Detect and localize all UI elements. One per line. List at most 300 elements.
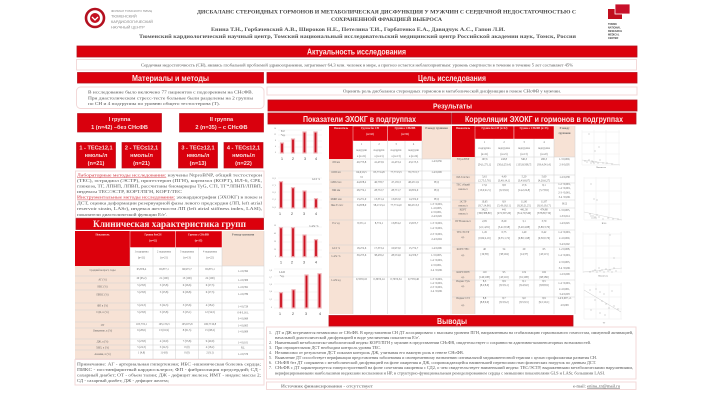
table: correlations of echo and hormones: [8,20;21,25] [517,204,531,208]
table: correlations of echo and hormones: 8,7 [502,297,506,300]
subgroup 3 box [178,142,218,168]
text block: relevance [76,60,636,70]
table: correlations of echo and hormones: [8,4;9,0] [519,284,529,287]
table: correlations of echo and hormones: [0,55;1,72] [498,237,510,240]
table: clinical characteristics: ИБС (%) [98,286,108,288]
table: echo indices: 8,3±1,4 [357,222,366,225]
table: clinical characteristics: 1 (4,8) [160,352,168,354]
table: correlations of echo and hormones: 8,29 [502,220,507,223]
table: correlations of echo and hormones: ед. [461,276,465,279]
bar chart: E/e': 8 [275,140,277,142]
table: correlations of echo and hormones: 11,87 [541,200,548,204]
bar chart: LASI: 4 [319,311,322,316]
table: correlations of echo and hormones: [2,1;4,81] [479,226,490,229]
table: clinical characteristics: 4 (18,2) [206,346,214,349]
table: echo indices: Н/Д [434,189,439,192]
text block: table note: СД - сахарный диабет; ДЖ - дефицит железа; [77,378,169,383]
table: echo indices: 48,4±11,9 [408,181,420,184]
text block: research methods: reservoir strain, LASr), индекса жесткости ЛП (left atrial stiffness index, LASI), [77,206,262,212]
table: echo indices: 64,6;16,5 [356,171,367,174]
heading: clinical characteristics: Клиническая характеристика групп [93,219,247,229]
table: correlations of echo and hormones: [93,4;541,4] [537,164,551,166]
subgroup 4 box: 4 - ТЕС≤12,1 [227,146,260,152]
table: clinical characteristics: 5 (24,3) [160,304,168,307]
table: correlations of echo and hormones: 3-4 <0,001 [559,196,571,199]
table: echo indices: подгрупп [374,149,385,152]
table: echo indices: Группа с СНсФВ [395,127,416,130]
funding note [266,382,636,390]
bar chart: E/e': 14 [274,128,277,130]
table: correlations of echo and hormones: [300;388,80] [478,212,492,215]
bar chart: LASr: 0 [275,256,277,258]
table: correlations of echo and hormones: 8,9 [502,280,506,283]
table: clinical characteristics: 9 (40,9) [206,340,214,343]
table: correlations of echo and hormones: 1-3 0,009, [559,158,570,161]
table: correlations of echo and hormones: (n=22) [540,153,548,156]
table: correlations of echo and hormones: [5,7;8,9] [539,189,549,192]
table: correlations of echo and hormones: [3,89;3,79] [538,226,550,229]
table: echo indices: ±2 [360,176,364,179]
group II box [180,114,264,132]
bar chart: LASr: LASr % [310,225,319,228]
funding note: Источник финансирования - отсутствует [281,383,373,388]
group I box: 1 (n=42) –без СНсФВ [91,124,148,131]
table: correlations of echo and hormones: 0,42 [542,231,547,234]
table: clinical characteristics: 1-4 0,729 [238,306,249,308]
table: clinical characteristics: 3-4 0,069 [238,318,249,320]
heading: relevance: Актуальность исследования [307,46,406,56]
table: echo indices: 13,3±1,4 [374,198,384,201]
table: correlations of echo and hormones: [0,30;0,76] [538,237,550,240]
table: correlations of echo and hormones: 441 [502,208,507,212]
table: echo indices [329,126,451,314]
table: echo indices: 1-3 0,005, [431,254,442,257]
bar chart: LASr [274,225,322,264]
table: correlations of echo and hormones: 17,6 [522,184,527,187]
table: correlations of echo and hormones: группами [559,132,571,135]
bar chart: LASr: 2 [291,260,294,264]
table: clinical characteristics: 1 (4,8) [138,352,145,354]
heading: aim [267,72,637,83]
subgroup 4 box: нмоль/л [232,153,255,159]
table: echo indices: 13,8±4,2 [391,222,401,225]
table: correlations of echo and hormones: [61;198] [519,276,529,279]
table: echo indices: 2-4 0,004 [431,238,442,241]
table: correlations of echo and hormones: 119 [522,271,527,274]
table: correlations of echo and hormones: 8,1 [542,184,546,187]
table: correlations of echo and hormones: Индекс СTI [456,297,470,300]
table: echo indices: подгрупп [391,149,402,152]
table: echo indices: подгрупп [408,149,419,152]
heading: correlations: Корреляции ЭХОКГ и гормонов в подгруппах [465,114,623,124]
bar chart: LASI: 0,2 [269,299,272,301]
table: echo indices: 77,7±13,3 [391,171,402,174]
text block: conclusions: СНсФВ без ДТ сопряжена с метаболической дисфункцией на фоне ожирения и ДЖ, сопровождающейся наименьшей переносимостью физических нагрузок по данным ДСТ. [275,361,596,366]
table: clinical characteristics: 6 (26,6) [183,284,191,287]
scatter plot 1 [582,130,620,169]
scatter plot 4 [584,283,622,324]
table: clinical characteristics: 6 (28,6) [137,329,146,332]
text block: research methods: Инструментальные методы исследования: эхокардиография (ЭХОКГ) в покое и [77,195,263,200]
text block: conclusions: 7. [269,366,272,370]
table: correlations of echo and hormones: 8,8 [502,184,506,187]
text block: conclusions: начальной диастолической дисфункцией в виде увеличения показателя Е/е'. [275,336,420,340]
table: correlations of echo and hormones: [272;507,20] [497,212,511,215]
table: clinical characteristics: 7 (53,8) [183,340,191,343]
table: echo indices: 13,6±5,7 [409,222,419,225]
logo: Tyumen cardiology research center [86,9,153,30]
heading: conclusions [329,316,573,326]
table: clinical characteristics: 2 подгруппа [157,250,172,254]
table: echo indices: 1-4 <0,001, [430,227,443,230]
text block: conclusions: Наименьший метаболическо-анаболический индекс КОРТ/ПГН у мужчин в представлении СНсФВ, свидетельствует о сохранности адаптивно-компенсаторных возможностей. [275,341,591,346]
table: correlations of echo and hormones: 474,80 [540,208,548,212]
table: clinical characteristics: 3 (23,6) [183,304,191,307]
bar chart: LASI: 0,6 [269,284,273,286]
subgroup 2 box: (n=21) [133,161,150,167]
table: correlations of echo and hormones: 2-4 0,009, [559,237,570,240]
table: correlations of echo and hormones: нмоль/л [458,204,468,208]
text block: aim: Оценить роль дисбаланса стероидных гормонов и метаболической дисфункции в генезе СНсФВ у мужчин. [343,90,561,94]
table: echo indices: 65,7±14,8 [374,171,385,174]
bar chart: LASI: 1 [279,311,282,316]
table: clinical characteristics: 65,8±6,4 [137,268,147,271]
table: clinical characteristics: 6 (26,8) [183,291,191,294]
text block: conclusions: ДТ и ДЖ встречаются независимо от СНсФВ. В представлении СН ДТ ассоциировано с высоким уровнем ПГН, направленным на стабилизацию гормонального гомеостаза, иммунной активацией, [275,331,633,336]
table: echo indices: 4 [413,143,415,146]
logo: Tomsk National Research Medical Center: CENTER [608,37,618,40]
table: clinical characteristics: 0 (0) [184,352,190,354]
table: clinical characteristics: ОТ [101,324,105,327]
logo: Tyumen cardiology research center: ФИЛИАЛ ТОМСКОГО НИМЦ [111,9,153,13]
heading: results: Результаты [433,102,472,111]
table: correlations of echo and hormones: [6,3;9,9] [499,189,509,192]
table: correlations of echo and hormones: [5,43;18,11] [497,204,511,208]
table: correlations of echo and hormones: 1,45 [482,231,488,234]
table: clinical characteristics: Показатель [95,234,110,236]
table: correlations of echo and hormones: 0,75 [502,231,507,234]
bar chart: LASI: 2 [292,311,295,316]
heading: echo indices in subgroups [268,113,451,124]
table: clinical characteristics: (n=35) [195,240,202,242]
text block: conclusions: 6. [269,361,272,365]
bar chart: GLS: 16,5 [272,192,277,194]
table: correlations of echo and hormones: ед. [461,285,465,288]
bar chart: LASI: 0,4 [269,291,273,293]
table: correlations of echo and hormones: [2,75;5,76] [479,180,491,182]
table: correlations of echo and hormones: [3,20;4,88] [518,226,530,229]
table: correlations of echo and hormones: [9,5;10,1] [539,301,549,304]
bar chart: GLS: 15,5 [272,199,277,201]
table: correlations of echo and hormones: [8,2;8,9] [480,284,489,287]
table: echo indices: 3 [395,143,397,146]
text block: conclusions: 4. [269,351,272,355]
text block: table note: сахарный диабет; ОТ - объем талии; ДЖ - дефицит железа; ИМТ - индекс массы 2; [77,372,261,378]
table: echo indices: 18,2±2,6 [357,247,367,250]
table: echo indices: Н/Д [434,181,439,184]
table: correlations of echo and hormones: ИЛ-6 пг/мл [456,176,470,179]
table: echo indices: 41,4±3,9 [374,161,384,164]
authors and affiliation: Енина Т.Н., Горбачевский А.В., Широков Н.Е., Петелина Т.И., Горбатенко Е.А., Давидчук А.С., Гапон Л.И. [211,26,506,33]
table: echo indices: 2-3 <0,001, [430,233,443,236]
table: echo indices: 39,2±5,6 [357,254,367,257]
table: correlations of echo and hormones: 1-4 0,045 [559,222,570,225]
table: correlations of echo and hormones: подгруппа [498,147,511,150]
table: clinical characteristics: 5 (23,8) [137,311,146,314]
table: echo indices: 76,7±15,7 [408,171,420,174]
table: echo indices: LASr % [332,255,341,258]
table: correlations of echo and hormones: 5,61 [482,176,488,178]
table: correlations of echo and hormones: [54,1;271,1] [478,164,491,166]
table: echo indices: 2-4 <0,001 [431,269,443,272]
table: clinical characteristics: 1-4 0,300 [238,279,249,282]
table: correlations of echo and hormones: ТЕС общий [456,184,470,186]
table: correlations of echo and hormones: 3 [523,141,525,144]
bar chart: LASr: 1 [280,260,283,264]
table: clinical characteristics: 1-4 0,392 [238,270,249,273]
bar chart: LASI: 0,7 [269,277,273,279]
scatter plot 2: ИЛ-6 [602,223,606,225]
table: correlations of echo and hormones: 2-3 0,003, [559,261,570,264]
text block: conclusions: При отрицательном ДСТ необходим контроль уровня ТЕС. [275,346,381,350]
table: correlations of echo and hormones: 65 [543,248,546,251]
table: correlations of echo and hormones: 1-4 <0,001, [558,254,571,257]
table: correlations of echo and hormones: Группа без СН (n=42) [482,127,508,130]
table: echo indices: 28,7±2,7 [374,189,384,192]
table: correlations of echo and hormones: [19;38] [481,253,489,256]
table: correlations of echo and hormones: 10,65 [481,200,488,204]
table: clinical characteristics: 0-8 0,161, [238,312,249,314]
table: correlations of echo and hormones: 1-2 0,008, [559,248,570,251]
table: echo indices: 1-4 <0,001, [430,282,443,285]
group I box: I группа [109,117,131,123]
table: clinical characteristics: 1-4 0,101 [238,342,249,344]
heading: results [268,100,637,111]
bar chart: LASI: *ед. [280,275,285,278]
table: echo indices: 38,4±6,2 [374,254,384,257]
table: correlations of echo and hormones [452,126,575,314]
subgroup 1 box: (n=21) [88,161,104,167]
text block: table note [75,360,264,385]
table: echo indices: 15,7±2,7 [409,247,419,250]
table: correlations of echo and hormones: [3,40;14,1] [498,180,510,182]
table: clinical characteristics: 6 (27,3) [206,291,214,294]
table: clinical characteristics: 1-4 0,009 [238,330,249,334]
table: echo indices: 1-3 <0,001, [430,278,443,281]
text block: conclusions: Независимо от результатов ДСТ показан контроль ДЖ, учитывая его важную роль в генезе СНсФВ. [275,351,464,356]
bar chart: LASI: LASI [279,271,285,274]
table: clinical characteristics: Группа с СНсФВ [188,234,209,236]
table: correlations of echo and hormones: 1-4 <0,001, [558,282,571,285]
table: clinical characteristics: 22 (100) [205,277,215,280]
table: correlations of echo and hormones: (n=21) [500,153,508,156]
table: correlations of echo and hormones: 5,20 [522,176,527,178]
table: echo indices: 77,7±14,0 [391,204,402,207]
table: clinical characteristics: 8 (61,5) [183,329,191,332]
table: correlations of echo and hormones: (n=21) [481,153,488,156]
bar chart: GLS: 4 [315,211,318,216]
table: correlations of echo and hormones: Н/Д [562,202,567,206]
table: correlations of echo and hormones: [135,8;508,7] [517,164,531,166]
table: correlations of echo and hormones: 17,6 [482,184,488,187]
table: correlations of echo and hormones: 1-2 0,009 [559,273,570,276]
table: echo indices: а (n=22) [409,155,418,158]
table: clinical characteristics: 5 (24,3) [160,346,168,349]
subgroup 3 box: 3 - ТЕС≥12,1 [181,146,215,152]
table: echo indices: 68,4±13,3 [408,204,420,207]
table: correlations of echo and hormones: 8,5 [542,280,546,283]
table: clinical characteristics: 1-4 0,576 [238,353,249,356]
subgroup 1 box: 1 - ТЕС≥12,1 [79,146,113,152]
logo: Tyumen cardiology research center: НАУЧНЫЙ ЦЕНТР [111,24,145,30]
text block: table note: Примечание: АГ - артериальная гипертензия; ИБС -ишемическая болезнь сердца; [77,362,261,366]
table: correlations of echo and hormones: 102 [542,271,547,274]
text block: conclusions: 5. [269,356,272,360]
table: correlations of echo and hormones: 243,8 [501,158,508,161]
table: correlations of echo and hormones: подгруппа [538,147,551,150]
table: clinical characteristics: 20 (95,2) [137,277,147,280]
logo: Tomsk National Research Medical Center: NATIONAL [608,26,621,30]
table: echo indices: 8,7±2,1 [375,222,384,225]
table: correlations of echo and hormones: 3,70 [542,220,547,223]
bar chart: GLS: 17,5 [272,185,277,187]
logo: Tyumen cardiology research center: КАРДИОЛОГИЧЕСКИЙ [111,19,153,24]
text block: table note: ПИКС - постинфарктный кардиосклероз; ФП - фибрилляция предсердий; СД - [77,367,262,372]
text block: conclusions: 1. [269,331,272,335]
bar chart: GLS: 3 [303,211,306,216]
table: clinical characteristics: 3 подгруппа [180,250,195,254]
table: correlations of echo and hormones: 8,3 [483,280,487,283]
table: correlations of echo and hormones: ТЕС/ЭСТР [457,231,470,234]
bar chart: GLS: 2 [291,211,294,216]
table: clinical characteristics: 105,7±6,1 [136,323,148,326]
table: clinical characteristics: (n=42) [149,240,157,242]
table: correlations of echo and hormones: 1-3 0,014 [559,215,570,218]
subgroup 2 box: 2 - ТЕС≤12,1 [125,146,158,152]
bar chart: GLS [272,178,322,216]
heading: materials and methods [78,72,264,83]
bar chart: E/e': 1 [281,156,284,161]
table: correlations of echo and hormones: 4 [543,141,545,144]
table: clinical characteristics: ПИКС (%) [96,294,109,296]
table: correlations of echo and hormones: КОРТ [460,208,467,212]
table: echo indices: 28,5±4,6 [391,254,401,257]
table: echo indices: МЖП мм [331,198,342,201]
table: echo indices: 0,30±0,14 [374,278,385,281]
table: clinical characteristics: 66,9±5,7 [182,268,192,271]
table: correlations of echo and hormones: 40 [483,248,486,251]
table: echo indices: 28,7±2,1 [357,189,367,192]
bar chart: E/e' [274,128,322,161]
bar chart: E/e': E/e' [281,130,286,133]
table: echo indices: 1-3 <0,001, [430,222,443,225]
table: correlations of echo and hormones: [8,10;19,17] [537,204,551,208]
table: clinical characteristics: 1-4 0,391 [238,286,249,289]
table: echo indices: ОЛП мл [331,171,341,174]
table: echo indices: 1-4 0,056 [431,160,442,163]
table: clinical characteristics: 0 (0) [184,346,190,349]
subgroup 2 box [122,142,161,168]
table: correlations of echo and hormones: нмоль/л [458,212,468,216]
scatter plot 4: ТГ [603,322,606,324]
table: clinical characteristics: 5 (24,3) [137,304,146,307]
table: echo indices: ПЖ мм [332,189,341,192]
table: clinical characteristics: 5 (23,8) [160,311,168,314]
logo: Tomsk National Research Medical Center: RESEARCH [608,30,622,33]
table: correlations of echo and hormones: 2-3 <0,001, [558,192,571,194]
table: correlations of echo and hormones: [8,3;9,2] [499,301,509,304]
table: echo indices: а (n=13) [391,155,401,158]
table: echo indices: Н/Д [434,198,439,201]
table: correlations of echo and hormones: 95 [503,271,506,274]
table: correlations of echo and hormones: [8,8;8,9] [539,284,549,287]
bar chart: E/e': 3 [304,156,307,161]
table: clinical characteristics: 105,1±6,3 [159,323,170,326]
table: correlations of echo and hormones: 8,8 [483,297,487,300]
table: correlations of echo and hormones: 260,3 [541,158,548,161]
bar chart: LASr: 20 [274,249,277,251]
heading: conclusions: Выводы [437,316,467,326]
table: echo indices: 2 [378,143,380,146]
table: clinical characteristics: Анемия, n (%) [94,353,111,356]
subgroup 1 box: нмоль/л [85,153,108,159]
table: correlations of echo and hormones: 8,9 [502,200,506,204]
table: correlations of echo and hormones: 1 [484,141,486,144]
table: echo indices: 44,6±8,2 [357,181,367,184]
table: correlations of echo and hormones: ЭСТР [460,200,467,204]
table: correlations of echo and hormones: 8,9 [542,297,546,300]
table: clinical characteristics: 13 (100) [182,277,192,280]
table: correlations of echo and hormones: [8,7;14,06] [479,204,491,208]
table: echo indices: а (n=21) [374,155,384,158]
table: echo indices: 2-3 <0,001, [430,286,443,289]
table: echo indices: подгрупп [356,149,367,152]
table: correlations of echo and hormones: 3-4 <0,001 [559,267,571,270]
subgroup 4 box [224,142,263,168]
table: clinical characteristics: 4 подгруппа [203,250,218,254]
table: correlations of echo and hormones: [4,20;6,27] [538,180,550,182]
table: clinical characteristics: (n=22) [206,256,214,260]
table: echo indices: GLS % [332,247,341,250]
table: clinical characteristics: Средний возраст, годы [90,269,116,272]
table: correlations of echo and hormones: 1-3 0,005, [559,209,570,212]
table: echo indices: 1-4 0,005, [431,207,442,210]
table: echo indices: 0,33±0,10 [356,278,368,281]
table: clinical characteristics: 106,7±10,8 [204,323,217,326]
table: echo indices: Показатель [334,127,349,130]
table: clinical characteristics: Ожирение, n (%) [93,330,112,332]
table: correlations of echo and hormones: КОРТ/ПГН [456,271,470,274]
heading: echo indices in subgroups: Показатели ЭХОКГ в подгруппах [303,114,416,124]
table: echo indices: 0,70±0,34 [391,278,402,281]
text block: patients: по СН и 4 подгруппы по уровню общего тестостерона (Т). [88,101,220,106]
table: echo indices: ОЛП2 мл [331,181,342,184]
table: clinical characteristics: 5 (23,8) [137,291,146,294]
table: clinical characteristics: 13 (61,9) [159,329,169,332]
table: correlations of echo and hormones: [0,84;2,16] [479,237,491,240]
table: echo indices: (n=42) [366,133,374,136]
heading: relevance [77,46,637,57]
subgroup 1 box [76,142,116,168]
text block: research methods: показатели диастолической функции Е/е'. [77,212,167,217]
table: correlations of echo and hormones: 197,6 [481,158,488,161]
table: correlations of echo and hormones: [68;186] [539,276,549,279]
table: clinical characteristics: 2 (9,1) [206,352,214,354]
scatter plot 3 [583,232,622,278]
table: echo indices: 24,3±6,7 [409,254,419,257]
authors and affiliation: Тюменский кардиологический научный центр, Томский национальный исследовательский медицинский центр Российской академии наук, Томск, Россия [139,33,576,40]
table: correlations of echo and hormones: 2,95 [482,220,488,223]
